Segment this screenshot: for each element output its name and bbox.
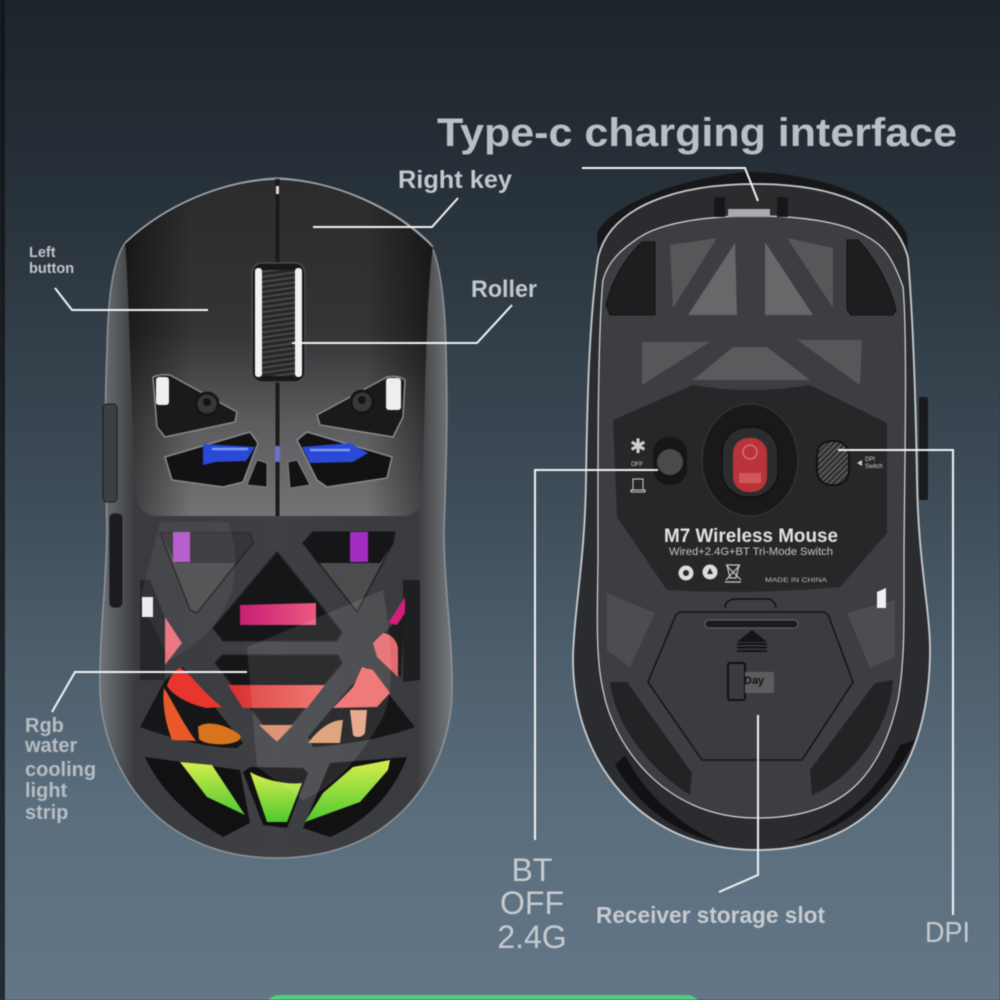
top left window — [160, 532, 253, 613]
bottom rim dark reflections — [615, 740, 915, 843]
green banner edge at bottom — [265, 995, 701, 1000]
product name: M7 Wireless Mouse — [664, 526, 838, 547]
translucent highlight right — [247, 590, 391, 800]
DPI button — [817, 441, 849, 485]
bottom skates — [610, 680, 893, 795]
heading: type-c charging interface: Type-c charging interface — [437, 111, 957, 155]
right blue light window — [297, 432, 392, 487]
grey see-through windows — [607, 238, 895, 668]
label: DPI: DPI — [925, 917, 970, 949]
left pink window — [165, 617, 182, 665]
mode icons: ✱ — [630, 434, 646, 458]
label plate — [613, 385, 887, 592]
bottom centre window — [243, 767, 308, 828]
bottom left window — [145, 757, 250, 837]
label: rgb water cooling light strip: water — [24, 735, 77, 757]
DPI switch tiny label — [857, 457, 883, 470]
left lower window with red tube — [140, 667, 243, 748]
right pink window — [373, 597, 405, 678]
white detail — [877, 588, 886, 608]
label: BT OFF 2.4G: OFF — [500, 885, 564, 921]
front mouse body shell — [100, 178, 452, 858]
mode icons — [630, 434, 646, 492]
mode switch — [653, 437, 687, 485]
label: BT OFF 2.4G: BT — [512, 852, 552, 888]
DPI switch tiny label: DPI — [865, 457, 875, 463]
label: BT OFF 2.4G: 2.4G — [497, 919, 567, 955]
type-c port — [714, 190, 788, 217]
callout lines — [52, 168, 953, 915]
centre lower window — [215, 655, 342, 742]
front view mouse — [100, 178, 452, 858]
top right window — [303, 532, 395, 612]
battery hatch — [648, 599, 853, 760]
back shell top rim — [597, 172, 910, 300]
label: rgb water cooling light strip: light — [25, 780, 68, 802]
back body — [573, 184, 930, 850]
left small vent — [247, 460, 267, 487]
top button plate — [125, 179, 433, 516]
centre glow — [275, 446, 280, 462]
back view mouse — [573, 172, 930, 850]
label: rgb water cooling light strip: strip — [25, 802, 68, 824]
mode icons: OFF — [631, 462, 643, 468]
side buttons — [103, 404, 123, 608]
label: rgb water cooling light strip: cooling — [25, 759, 96, 781]
right vent window — [317, 376, 405, 437]
right side slot — [403, 580, 420, 682]
top skates — [606, 240, 896, 315]
DPI switch tiny label: Switch — [865, 464, 883, 470]
label: left button: Left — [29, 245, 56, 261]
left blue light window — [165, 432, 258, 487]
label: rgb water cooling light strip: Rgb — [25, 715, 64, 737]
battery hatch: Day — [744, 675, 765, 687]
right lower window with salmon tube — [308, 667, 415, 747]
left vent window — [153, 375, 237, 437]
inner clear rim — [597, 216, 906, 818]
translucent highlight left — [140, 522, 235, 660]
DPI side button — [919, 397, 928, 500]
label: roller: Roller — [471, 276, 537, 303]
made in china: MADE IN CHINA — [765, 577, 828, 584]
scroll wheel — [252, 263, 305, 382]
bottom right window — [303, 757, 407, 837]
label: receiver storage slot: Receiver storage slot — [596, 902, 825, 928]
centre upper window — [213, 552, 342, 641]
left side slot with white part — [140, 580, 165, 680]
right small vent — [288, 460, 310, 488]
label: right key: Right key — [398, 166, 512, 194]
sensor — [702, 404, 798, 516]
certification icons — [678, 564, 741, 582]
lower lattice windows — [140, 522, 420, 837]
label: left button: button — [29, 261, 74, 277]
product subtitle: Wired+2.4G+BT Tri-Mode Switch — [669, 546, 833, 558]
